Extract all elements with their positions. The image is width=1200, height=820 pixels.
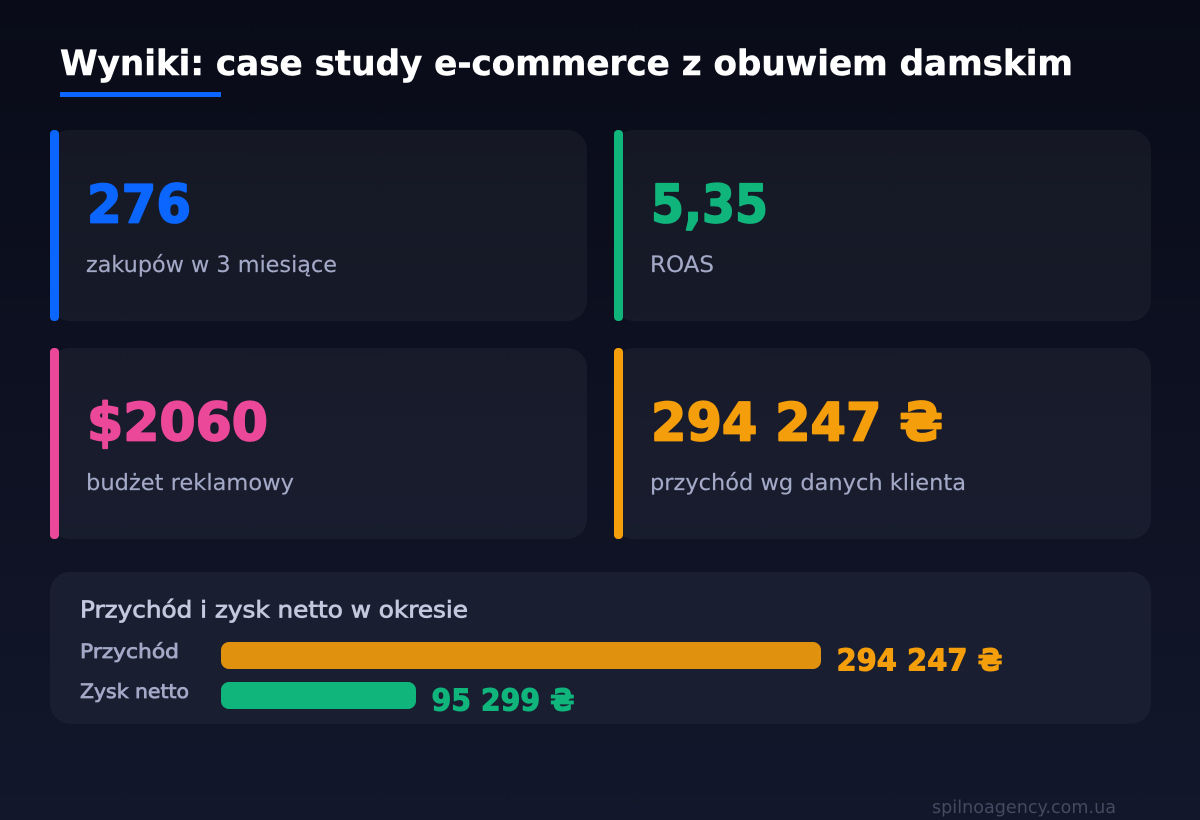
bar row: revenue: Przychód — [80, 640, 179, 663]
card: revenue: przychód wg danych klienta — [650, 471, 966, 496]
bar row: net profit: 95 299 ₴ — [432, 684, 574, 718]
card: ad budget: budżet reklamowy — [86, 471, 294, 496]
chart heading: Przychód i zysk netto w okresie — [80, 596, 468, 624]
card: purchases — [50, 130, 587, 321]
card: ROAS — [614, 130, 1151, 321]
card: revenue: 294 247 ₴ — [651, 392, 943, 454]
card: ROAS: 5,35 — [651, 174, 768, 236]
panel: revenue and net profit chart — [50, 572, 1151, 724]
card: ROAS: ROAS — [650, 253, 714, 278]
card: revenue — [614, 348, 1151, 539]
card: ad budget — [50, 348, 587, 539]
footer credit: spilnoagency.com.ua — [932, 798, 1116, 818]
bar row: revenue: 294 247 ₴ — [836, 644, 1002, 678]
bar row: net profit: Zysk netto — [80, 680, 189, 703]
title: Wyniki: case study e-commerce z obuwiem damskim — [60, 44, 1073, 84]
bar row: net profit — [80, 680, 574, 718]
card: purchases: zakupów w 3 miesiące — [86, 253, 337, 278]
card: purchases: 276 — [87, 174, 191, 236]
card: ad budget: $2060 — [87, 392, 268, 454]
bar row: revenue — [80, 640, 1002, 678]
